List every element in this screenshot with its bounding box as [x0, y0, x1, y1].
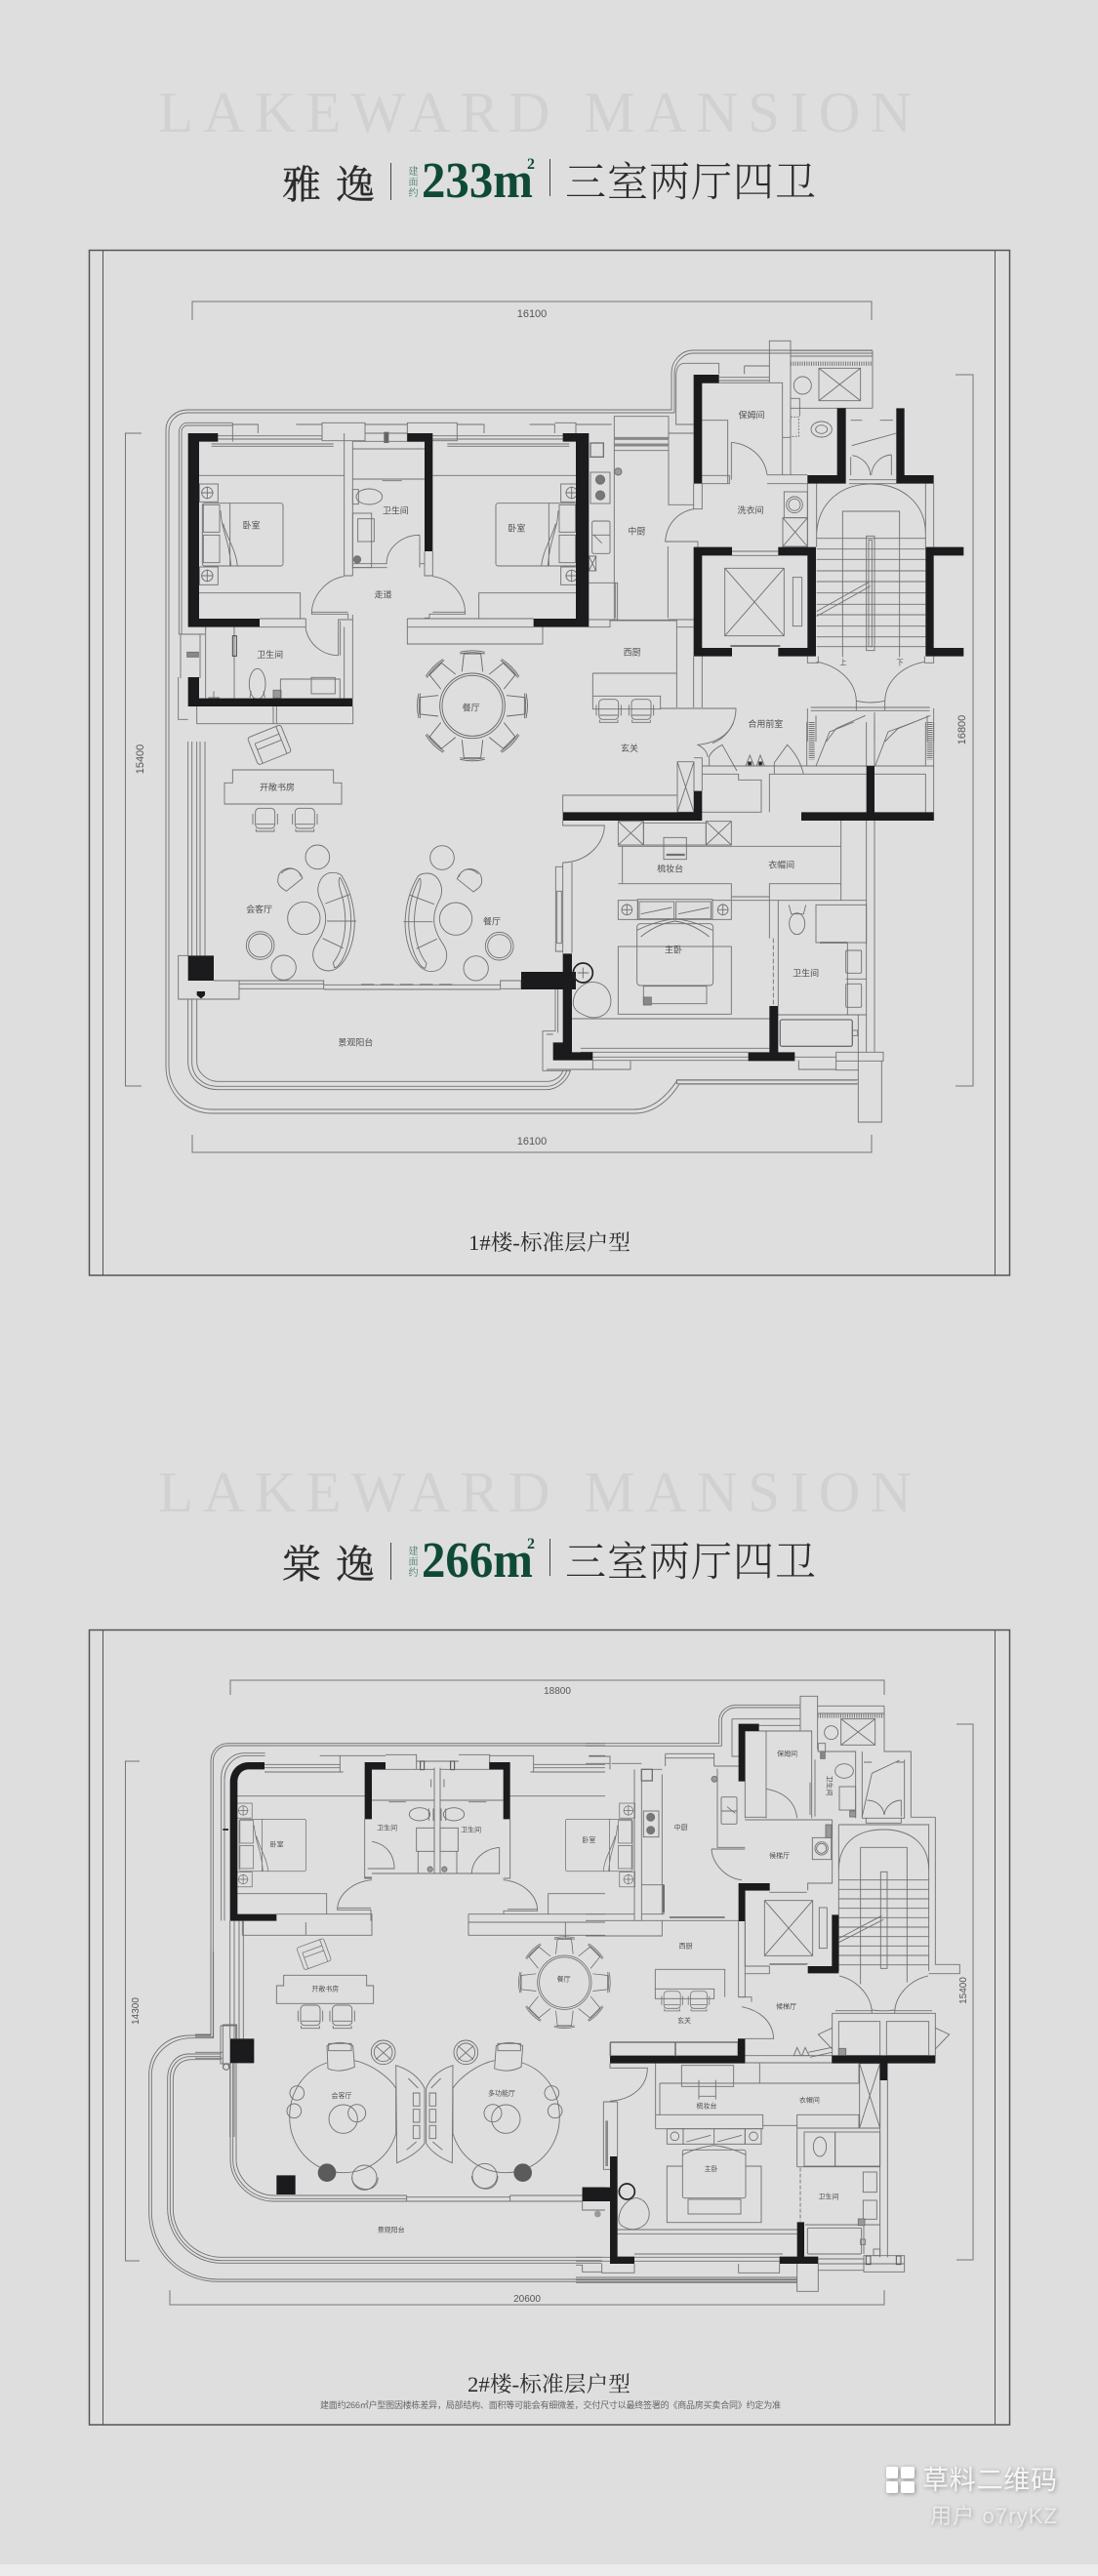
room labels: 西厨: [624, 648, 641, 658]
room labels: 卫生间: [825, 1776, 834, 1795]
dimensions: plan 1: 16800: [956, 715, 968, 745]
plan 2 caption: 2#楼-标准层户型: [468, 2372, 630, 2396]
room labels: 候梯厅: [769, 1851, 790, 1860]
room labels: [243, 504, 525, 712]
icon: desk chairs: [253, 808, 317, 831]
room labels: [270, 1824, 595, 1993]
walls: [611, 1724, 935, 2080]
floor plan 2: living rooms and terrace: [149, 1952, 797, 2281]
vertical label area: 约: [408, 1564, 418, 1579]
vertical label area: 建: [408, 163, 418, 178]
unit name: 雅逸: [282, 163, 375, 207]
room labels: [697, 2096, 838, 2201]
room labels: 会客厅: [246, 904, 272, 914]
room labels: 上: [839, 658, 847, 666]
divider right: [549, 159, 550, 196]
room labels: 餐厅: [463, 702, 480, 712]
icon: logo tiles: [886, 2467, 915, 2493]
stairs: [817, 511, 925, 657]
room labels: 餐厅: [483, 915, 501, 926]
room labels: 玄关: [621, 743, 638, 753]
dimensions: plan 2: 18800: [544, 1686, 571, 1697]
round lounge left: [287, 2040, 396, 2190]
brand watermark title: LAKEWARD MANSION: [158, 1460, 912, 1524]
divider left: [390, 1543, 392, 1580]
room labels: 洗衣间: [738, 504, 763, 515]
walls: [583, 2038, 935, 2264]
vertical label area: [408, 1543, 418, 1579]
room labels: 中厨: [674, 1823, 688, 1831]
vertical label area: 建: [408, 1543, 418, 1557]
room labels: 衣帽间: [768, 859, 794, 869]
panel: header 雅逸: [158, 80, 912, 209]
disclaimer note: 建面约266㎡户型图因楼栋差异，局部结构、面积等可能会有细微差，交付尺寸以最终签署的《商品房买卖合同》约定为准: [320, 2399, 781, 2410]
panel: header 棠逸: [158, 1460, 912, 1589]
vertical label area: 约: [408, 184, 418, 199]
icon: bed left: [199, 484, 283, 584]
room labels: 卫生间: [257, 649, 283, 660]
floor plan 1: upper left bedrooms: [179, 423, 580, 765]
dimensions: plan 2: 14300: [131, 1997, 142, 2025]
panel: floor plan frame 2: [90, 1630, 1009, 2425]
icon: bar stools: [596, 700, 654, 722]
dimensions: plan 1: 16100: [517, 1136, 547, 1147]
floor plan 2: master suite: [576, 2038, 935, 2291]
icon: master bath: [800, 2064, 887, 2257]
room labels: [621, 743, 819, 979]
room labels: [246, 782, 501, 1048]
floor plan 1: kitchen, core, stairs: [576, 341, 963, 744]
icon: lift box service: [825, 1719, 875, 1745]
vertical label area: [408, 163, 418, 199]
walls: [276, 2175, 605, 2201]
walls: [230, 1762, 510, 2063]
dimensions: plan 1: 15400: [135, 745, 146, 774]
area figure: 233m: [422, 153, 533, 209]
room labels: 下: [896, 658, 904, 666]
vertical label area: 面: [408, 174, 418, 188]
watermark user: 用户 o7ryKZ: [930, 2504, 1057, 2528]
room labels: 主卧: [705, 2164, 718, 2173]
layout text: 三室两厅四卫: [565, 1541, 816, 1586]
floor plan 1: master suite: [547, 722, 934, 1122]
divider left: [390, 163, 392, 200]
area figure: 266m: [422, 1533, 533, 1589]
room labels: 玄关: [677, 2016, 691, 2025]
icon: kitchen appliances: [641, 1769, 832, 1860]
icon: bed right: [496, 484, 580, 584]
walls: [547, 766, 934, 1061]
plan 1 caption: 1#楼-标准层户型: [468, 1230, 630, 1255]
room labels: 景观阳台: [378, 2226, 405, 2234]
room labels: [674, 1750, 834, 2025]
dimensions: plan 2: [125, 1680, 973, 2305]
room labels: 餐厅: [557, 1975, 571, 1984]
area figure: 2: [527, 156, 535, 173]
round lounge right: [453, 2040, 562, 2189]
room labels: 走道: [375, 589, 392, 600]
room labels: 卧室: [508, 523, 525, 534]
room labels: 多功能厅: [488, 2088, 515, 2097]
walls: [188, 433, 576, 706]
icon: washer: [783, 492, 807, 546]
icon: dressing table: [618, 822, 731, 860]
room labels: 卫生间: [793, 968, 819, 979]
island: [655, 1969, 725, 2011]
icon: left bath fixtures: [187, 652, 340, 700]
room labels: 景观阳台: [338, 1037, 373, 1048]
dimensions: plan 2: 15400: [958, 1977, 969, 2004]
lift: [725, 551, 802, 636]
room labels: 开敞书房: [311, 1985, 339, 1993]
icon: beds: [236, 1803, 634, 1887]
bottom light strip: [0, 2564, 1098, 2576]
room labels: 梳妆台: [697, 2102, 716, 2111]
unit name: 棠逸: [282, 1543, 375, 1587]
lift lobby: [793, 2011, 950, 2057]
icon: squat toilet: [791, 417, 896, 484]
floor plan 2: kitchen and core: [586, 1696, 959, 2080]
room labels: 中厨: [628, 526, 645, 537]
icon: desk chairs: [298, 2005, 354, 2029]
watermark: QR service logo: [886, 2466, 1057, 2528]
dimensions: plan 2: 20600: [513, 2294, 541, 2305]
vertical label area: 面: [408, 1553, 418, 1568]
dining table: [518, 1937, 610, 2029]
sofa group left: [246, 845, 356, 980]
dining table: [417, 651, 527, 761]
lift: [764, 1892, 827, 1964]
watermark text: 草料二维码: [922, 2466, 1057, 2495]
icon: desk: [224, 770, 342, 804]
layout text: 三室两厅四卫: [565, 161, 816, 206]
icon: master bed: [667, 2129, 761, 2223]
icon: shoes: [746, 755, 764, 766]
room labels: 卧室: [243, 519, 261, 530]
room labels: 梳妆台: [657, 863, 683, 873]
icon: master bed: [618, 900, 731, 1014]
central sofas: [396, 2066, 453, 2163]
room labels: 西厨: [679, 1943, 693, 1951]
room labels: [332, 2088, 515, 2234]
divider right: [549, 1539, 550, 1576]
icon: lift box service: [793, 368, 861, 401]
icon: armchair: [247, 725, 292, 765]
room labels: 主卧: [665, 945, 682, 955]
floor plan 1: living rooms and terrace: [179, 742, 576, 1090]
floor plan 2: bedrooms: [195, 1744, 634, 2137]
panel: floor plan frame 1: [90, 250, 1009, 1275]
icon: armchair: [297, 1938, 332, 1970]
walls: [188, 955, 576, 998]
icon: toilet: [352, 489, 383, 504]
room labels: 卧室: [270, 1839, 284, 1848]
room labels: 开敞书房: [260, 782, 295, 792]
brand watermark title: LAKEWARD MANSION: [158, 80, 912, 144]
room labels: 衣帽间: [799, 2096, 820, 2105]
icon: service bath: [815, 1744, 905, 1823]
icon: master bath fixtures: [773, 901, 867, 1046]
room labels: 卫生间: [383, 504, 409, 515]
dimensions: plan 1: 16100: [517, 308, 547, 320]
icon: desk: [276, 1975, 374, 2003]
room labels: 卫生间: [377, 1824, 397, 1832]
stairs: [838, 1817, 959, 1984]
walls: [576, 375, 963, 657]
room labels: 会客厅: [332, 2091, 351, 2100]
icon: kitchen appliances: [589, 443, 622, 620]
room labels: [624, 410, 904, 729]
room labels: 保姆间: [739, 410, 764, 421]
room labels: 卧室: [582, 1835, 595, 1844]
icon: lounge chair: [619, 2184, 649, 2230]
dimensions: plan 1: [125, 302, 973, 1152]
twin baths: [364, 1768, 510, 1878]
sofa group right: [403, 846, 513, 981]
parapet outline: plan 1: [166, 350, 873, 1113]
icon: vanity: [352, 513, 374, 568]
room labels: 候梯厅: [776, 2001, 796, 2010]
icon: lounge chair: [573, 963, 611, 1018]
area figure: 2: [527, 1536, 535, 1552]
room labels: 卫生间: [461, 1825, 481, 1833]
room labels: 合用前室: [748, 718, 783, 729]
room labels: 保姆间: [777, 1750, 797, 1758]
room labels: 卫生间: [819, 2193, 838, 2201]
